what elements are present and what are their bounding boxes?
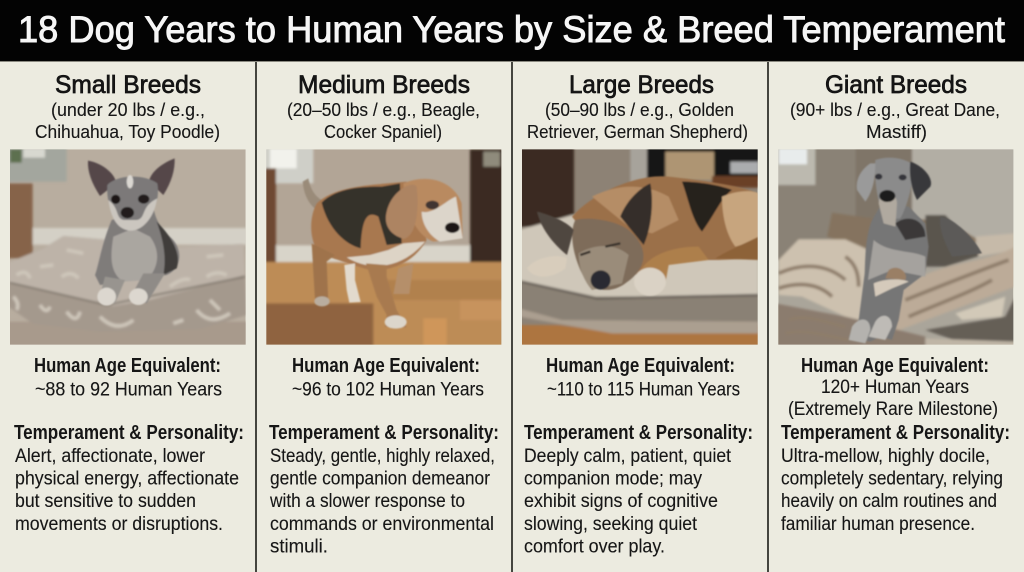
temperament text: medium breeds: stimuli. xyxy=(270,536,328,558)
heading: medium breeds: Medium Breeds xyxy=(298,71,470,99)
human age equivalent: small breeds xyxy=(34,355,222,400)
heading: giant breeds: Giant Breeds xyxy=(825,71,967,99)
temperament text: medium breeds: gentle companion demeanor xyxy=(270,468,491,490)
size description: large breeds: (50–90 lbs / e.g., Golden xyxy=(545,99,734,120)
human age equivalent: small breeds: ~88 to 92 Human Years xyxy=(35,380,222,400)
photo: beagle walking on wood floor xyxy=(263,147,507,349)
human age equivalent: large breeds: Human Age Equivalent: xyxy=(546,355,735,377)
temperament text: small breeds xyxy=(14,422,244,535)
temperament text: large breeds: Temperament & Personality: xyxy=(524,422,753,444)
size description: large breeds xyxy=(527,99,748,142)
temperament text: small breeds: Alert, affectionate, lower xyxy=(15,446,206,467)
size description: giant breeds xyxy=(790,99,1000,142)
heading: small breeds: Small Breeds xyxy=(55,71,201,99)
size description: medium breeds xyxy=(287,99,480,142)
temperament text: large breeds: exhibit signs of cognitive xyxy=(524,491,718,512)
human age equivalent: large breeds: ~110 to 115 Human Years xyxy=(547,380,740,400)
temperament text: small breeds: but sensitive to sudden xyxy=(15,491,196,512)
temperament text: giant breeds: Ultra-mellow, highly docile, xyxy=(781,446,990,467)
temperament text: small breeds: Temperament & Personality: xyxy=(14,422,244,444)
temperament text: giant breeds: heavily on calm routines and xyxy=(781,491,997,512)
human age equivalent: medium breeds xyxy=(292,355,484,400)
heading: large breeds: Large Breeds xyxy=(569,71,714,99)
temperament text: giant breeds: familiar human presence. xyxy=(781,514,975,535)
title banner: 18 Dog Years to Human Years by Size & Breed Temperament xyxy=(18,9,1006,50)
human age equivalent: giant breeds: 120+ Human Years xyxy=(821,377,969,398)
human age equivalent: giant breeds: (Extremely Rare Milestone) xyxy=(788,399,998,420)
size description: large breeds: Retriever, German Shepherd) xyxy=(527,121,748,142)
temperament text: medium breeds: Temperament & Personality: xyxy=(269,422,499,444)
temperament text: small breeds: physical energy, affectionate xyxy=(15,468,239,490)
photo: chihuahua on cushion xyxy=(7,147,250,347)
panel: large breeds xyxy=(519,71,762,558)
size description: medium breeds: Cocker Spaniel) xyxy=(324,121,442,142)
human age equivalent: large breeds xyxy=(546,355,740,400)
size description: giant breeds: (90+ lbs / e.g., Great Dane, xyxy=(790,99,1000,120)
photo: great dane on blankets xyxy=(775,147,1015,347)
temperament text: medium breeds xyxy=(269,422,499,558)
photo: german shepherd sleeping on bed xyxy=(519,147,762,347)
temperament text: medium breeds: with a slower response to xyxy=(269,491,465,512)
temperament text: large breeds: slowing, seeking quiet xyxy=(524,514,698,535)
temperament text: large breeds xyxy=(524,422,753,558)
temperament text: large breeds: comfort over play. xyxy=(524,536,665,558)
size description: small breeds: (under 20 lbs / e.g., xyxy=(51,99,205,120)
temperament text: small breeds: movements or disruptions. xyxy=(15,514,223,535)
panel: medium breeds xyxy=(263,71,507,558)
human age equivalent: giant breeds: Human Age Equivalent: xyxy=(801,355,989,377)
size description: medium breeds: (20–50 lbs / e.g., Beagle, xyxy=(287,99,480,120)
human age equivalent: small breeds: Human Age Equivalent: xyxy=(34,355,221,377)
panel: small breeds xyxy=(7,71,250,535)
panel: giant breeds xyxy=(775,71,1015,535)
title banner xyxy=(0,0,1024,62)
temperament text: medium breeds: commands or environmental xyxy=(270,514,494,535)
temperament text: giant breeds xyxy=(781,422,1010,535)
temperament text: giant breeds: completely sedentary, relying xyxy=(781,468,1003,490)
temperament text: medium breeds: Steady, gentle, highly relaxed, xyxy=(270,446,495,467)
human age equivalent: giant breeds xyxy=(788,355,998,420)
size description: small breeds: Chihuahua, Toy Poodle) xyxy=(35,121,220,142)
size description: giant breeds: Mastiff) xyxy=(866,121,927,142)
human age equivalent: medium breeds: ~96 to 102 Human Years xyxy=(292,380,484,400)
temperament text: large breeds: Deeply calm, patient, quiet xyxy=(524,446,732,467)
human age equivalent: medium breeds: Human Age Equivalent: xyxy=(292,355,480,377)
temperament text: large breeds: companion mode; may xyxy=(524,468,702,490)
size description: small breeds xyxy=(35,99,220,142)
